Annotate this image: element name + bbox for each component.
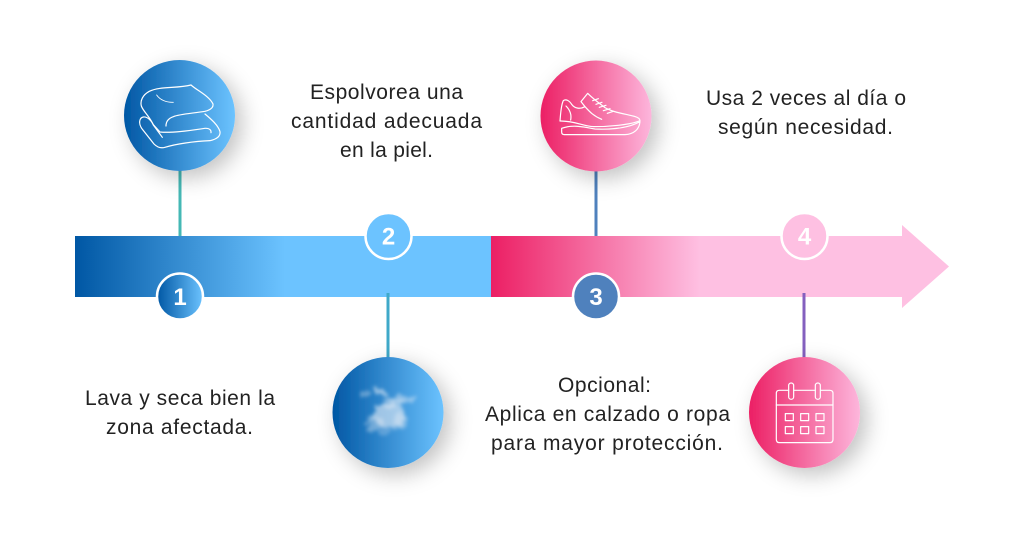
connector line: step 4	[802, 293, 806, 358]
connector line: step 3	[594, 170, 598, 236]
step number 4: 4	[798, 224, 812, 250]
step number 1	[157, 274, 203, 320]
connector line: step 2	[386, 293, 390, 358]
icon: sneaker	[540, 60, 652, 172]
text: step 3	[485, 374, 730, 455]
text: step 1: Lava y seca bien la	[85, 387, 275, 410]
step number 2	[366, 213, 412, 259]
icon: calendar	[749, 357, 860, 468]
step number 2: 2	[382, 224, 395, 250]
text: step 2: Espolvorea una	[310, 81, 463, 104]
text: step 1: zona afectada.	[106, 416, 253, 439]
connector line: step 1	[178, 170, 182, 236]
step number 3	[573, 274, 619, 320]
text: step 4: según necesidad.	[718, 116, 893, 139]
timeline arrow	[75, 225, 949, 308]
text: step 4: Usa 2 veces al día o	[706, 87, 906, 110]
text: step 3: Opcional:	[558, 374, 651, 397]
step number 3: 3	[589, 284, 603, 311]
icon: towels	[124, 60, 235, 171]
text: step 3: para mayor protección.	[491, 432, 723, 455]
text: step 4	[706, 87, 906, 139]
icon: powder cloud	[332, 357, 444, 468]
text: step 2	[291, 81, 482, 162]
text: step 2: en la piel.	[340, 139, 433, 162]
text: step 2: cantidad adecuada	[291, 110, 482, 133]
step number 4	[782, 213, 828, 259]
text: step 1	[85, 387, 275, 439]
text: step 3: Aplica en calzado o ropa	[485, 403, 730, 426]
step number 1: 1	[173, 284, 187, 311]
